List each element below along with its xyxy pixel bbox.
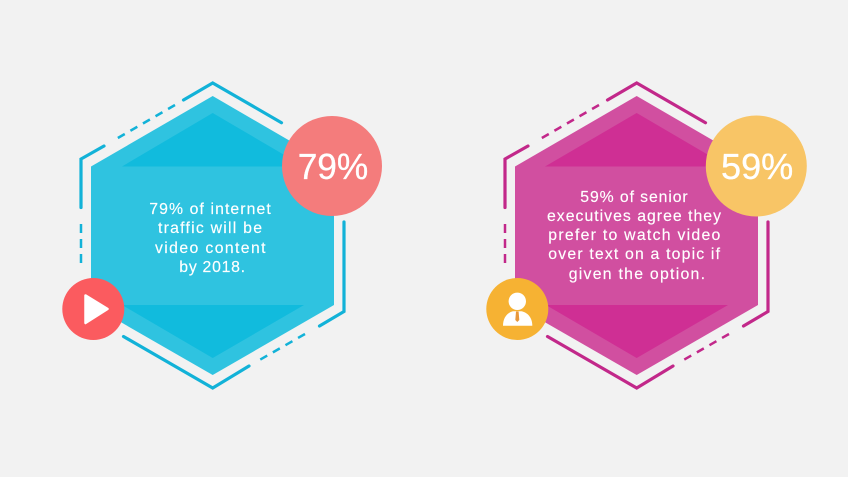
hexagon outline strokes <box>81 83 344 388</box>
description text: traffic will be <box>158 220 262 237</box>
description text <box>149 201 271 276</box>
description text: by 2018. <box>179 259 245 276</box>
stat badge: 59% <box>706 116 807 216</box>
top inner triangle <box>545 113 728 166</box>
bottom inner triangle <box>546 305 728 358</box>
description text <box>547 189 721 283</box>
stat badge: 79%: 79% <box>298 146 368 187</box>
hexagon outline strokes <box>505 83 768 388</box>
hexagon body <box>515 96 758 375</box>
description text: prefer to watch video <box>548 227 721 244</box>
panel: video traffic hexagon <box>62 83 382 388</box>
bottom inner triangle <box>122 305 304 358</box>
description text: given the option. <box>569 266 705 283</box>
description text: video content <box>155 240 266 257</box>
stat badge: 59%: 59% <box>721 146 793 187</box>
top inner triangle <box>122 113 304 166</box>
description text: 79% of internet <box>149 201 271 218</box>
stat badge: 79% <box>282 116 382 216</box>
description text: over text on a topic if <box>548 246 721 263</box>
description text: executives agree they <box>547 208 721 225</box>
panel: senior executives hexagon <box>486 83 807 388</box>
description text: 59% of senior <box>580 189 688 206</box>
hexagon body <box>91 96 334 375</box>
icon: executive person <box>486 278 548 340</box>
icon: play button <box>62 278 124 340</box>
